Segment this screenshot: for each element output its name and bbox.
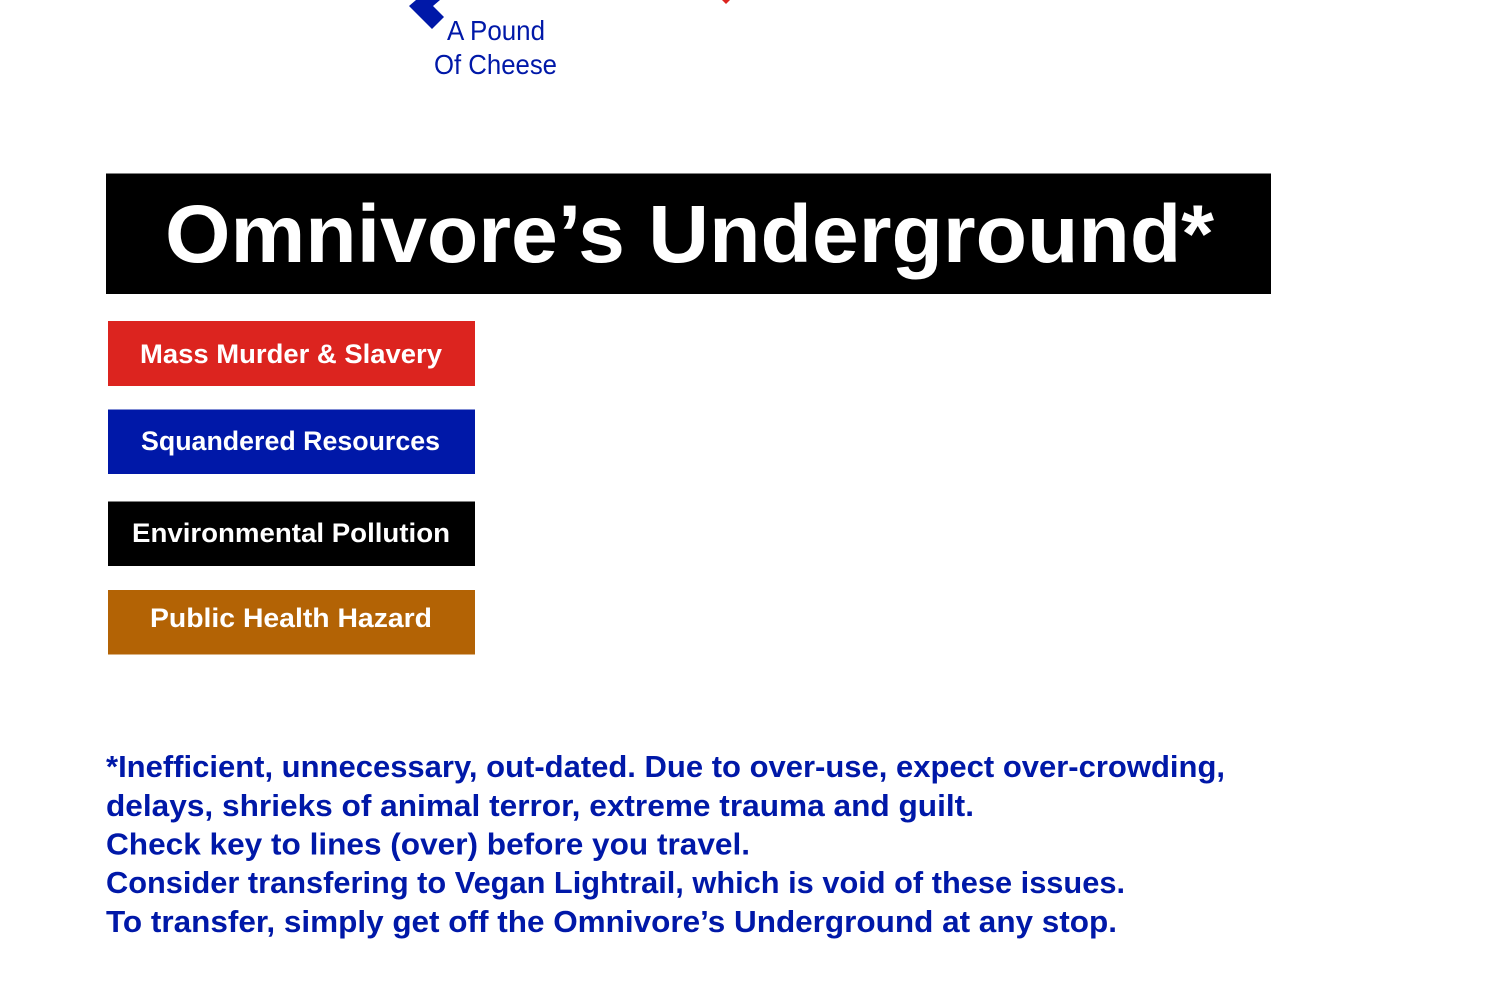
legend: Environmental Pollution: Environmental Pollution	[132, 518, 450, 548]
legend: Public Health Hazard: Public Health Hazard	[150, 603, 432, 633]
legend: Mass Murder & Slavery	[108, 321, 475, 386]
legend: Environmental Pollution	[108, 502, 475, 566]
legend: Mass Murder & Slavery: Mass Murder & Slavery	[140, 339, 442, 369]
station label: A Pound Of Cheese	[434, 15, 557, 80]
title banner	[106, 174, 1271, 294]
legend: Squandered Resources: Squandered Resources	[141, 426, 440, 456]
legend: Squandered Resources	[108, 410, 475, 474]
footnote text	[106, 749, 1225, 939]
legend: Public Health Hazard	[108, 590, 475, 654]
footnote text: delays, shrieks of animal terror, extreme trauma and guilt.	[106, 788, 974, 823]
icon: red station marker	[722, 0, 730, 4]
station label: A Pound Of Cheese: Of Cheese	[434, 49, 557, 80]
footnote text: Check key to lines (over) before you travel.	[106, 826, 750, 862]
footnote text: Consider transfering to Vegan Lightrail, which is void of these issues.	[106, 865, 1125, 900]
icon: blue station marker	[409, 0, 444, 29]
footnote text: *Inefficient, unnecessary, out-dated. Due to over-use, expect over-crowding,	[106, 749, 1225, 784]
title banner: Omnivore’s Underground*	[165, 189, 1214, 280]
footnote text: To transfer, simply get off the Omnivore’s Underground at any stop.	[106, 904, 1117, 939]
station label: A Pound Of Cheese: A Pound	[447, 15, 545, 46]
